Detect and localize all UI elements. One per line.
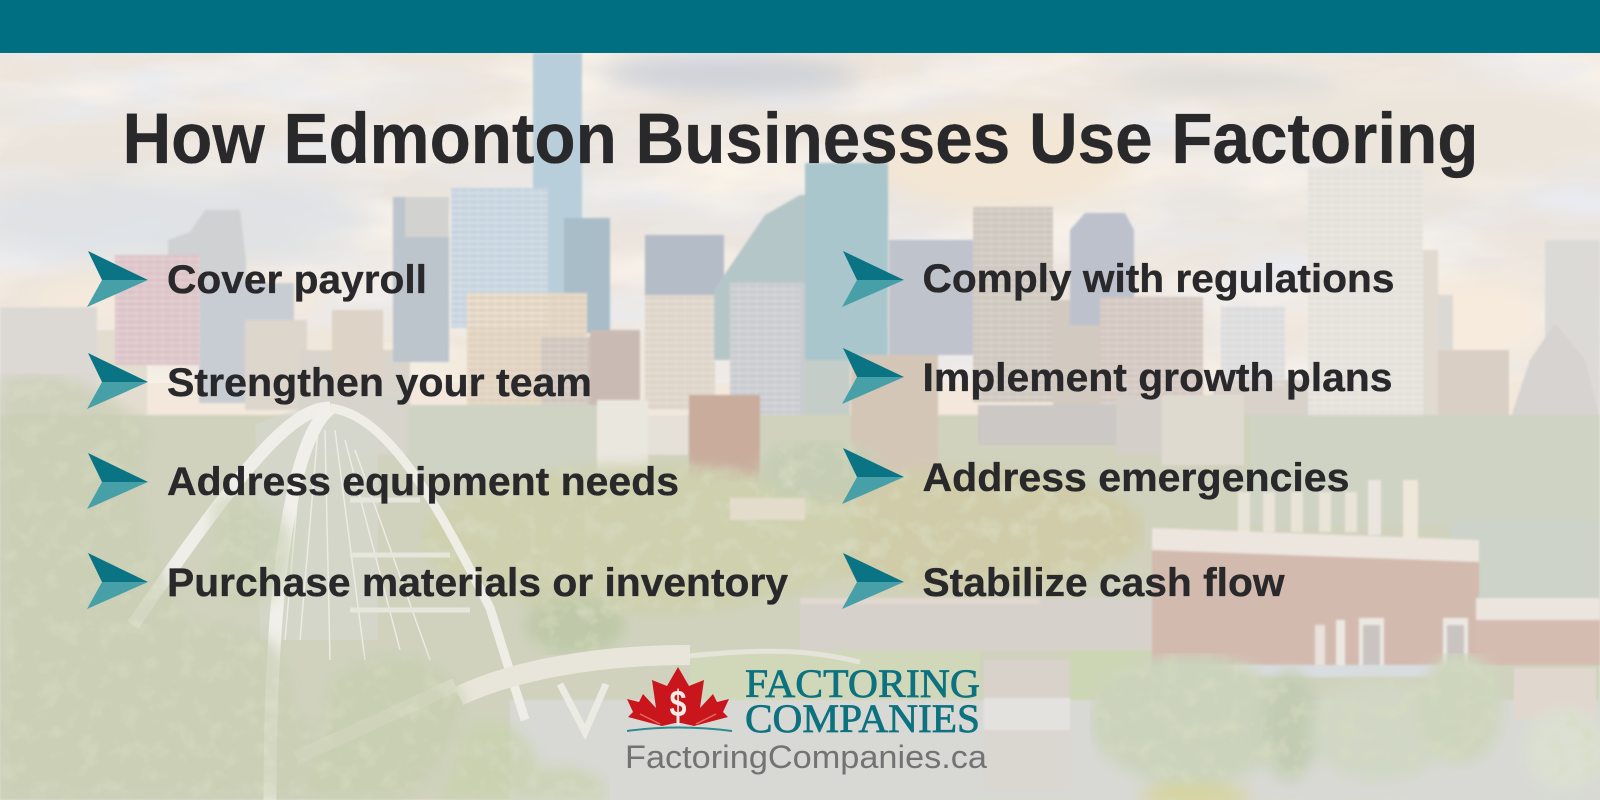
item: comply with regulations: Comply with regulations [922,257,1394,301]
logo: Factoring Companies [625,661,987,775]
right-hand trees [1090,653,1600,800]
item: implement growth plans [842,348,1392,404]
icon: maple leaf with dollar sign [627,667,732,731]
item: address equipment needs: Address equipment needs [167,460,679,504]
power plant [1238,492,1250,532]
item: cover payroll [87,251,427,307]
item: address emergencies [842,448,1350,504]
item: strengthen your team: Strengthen your team [167,361,592,405]
item: implement growth plans: Implement growth plans [922,356,1392,400]
logo wordmark [745,661,980,741]
list: right column [842,251,1394,609]
item: address equipment needs [87,453,679,509]
foreground tree leaves [0,374,610,800]
bridge [133,406,860,800]
item: cover payroll: Cover payroll [167,258,427,302]
item: strengthen your team [87,353,592,409]
item: stabilize cash flow: Stabilize cash flow [922,561,1285,605]
item: purchase materials or inventory [87,553,789,609]
icon: maple leaf with dollar sign: $ [670,683,687,724]
logo wordmark: COMPANIES [745,696,980,741]
website url: FactoringCompanies.ca [625,739,987,775]
item: stabilize cash flow [842,553,1285,609]
item: purchase materials or inventory: Purchase materials or inventory [167,561,789,605]
foliage band [420,440,1145,655]
lower land [0,415,1600,800]
item: comply with regulations [842,251,1394,307]
window stripes [115,167,1423,433]
title: How Edmonton Businesses Use Factoring [122,100,1478,179]
list: left column [87,251,789,609]
top teal band [0,0,1600,53]
logo wordmark: FACTORING [745,661,980,706]
far towers [0,307,97,417]
item: address emergencies: Address emergencies [922,456,1350,500]
